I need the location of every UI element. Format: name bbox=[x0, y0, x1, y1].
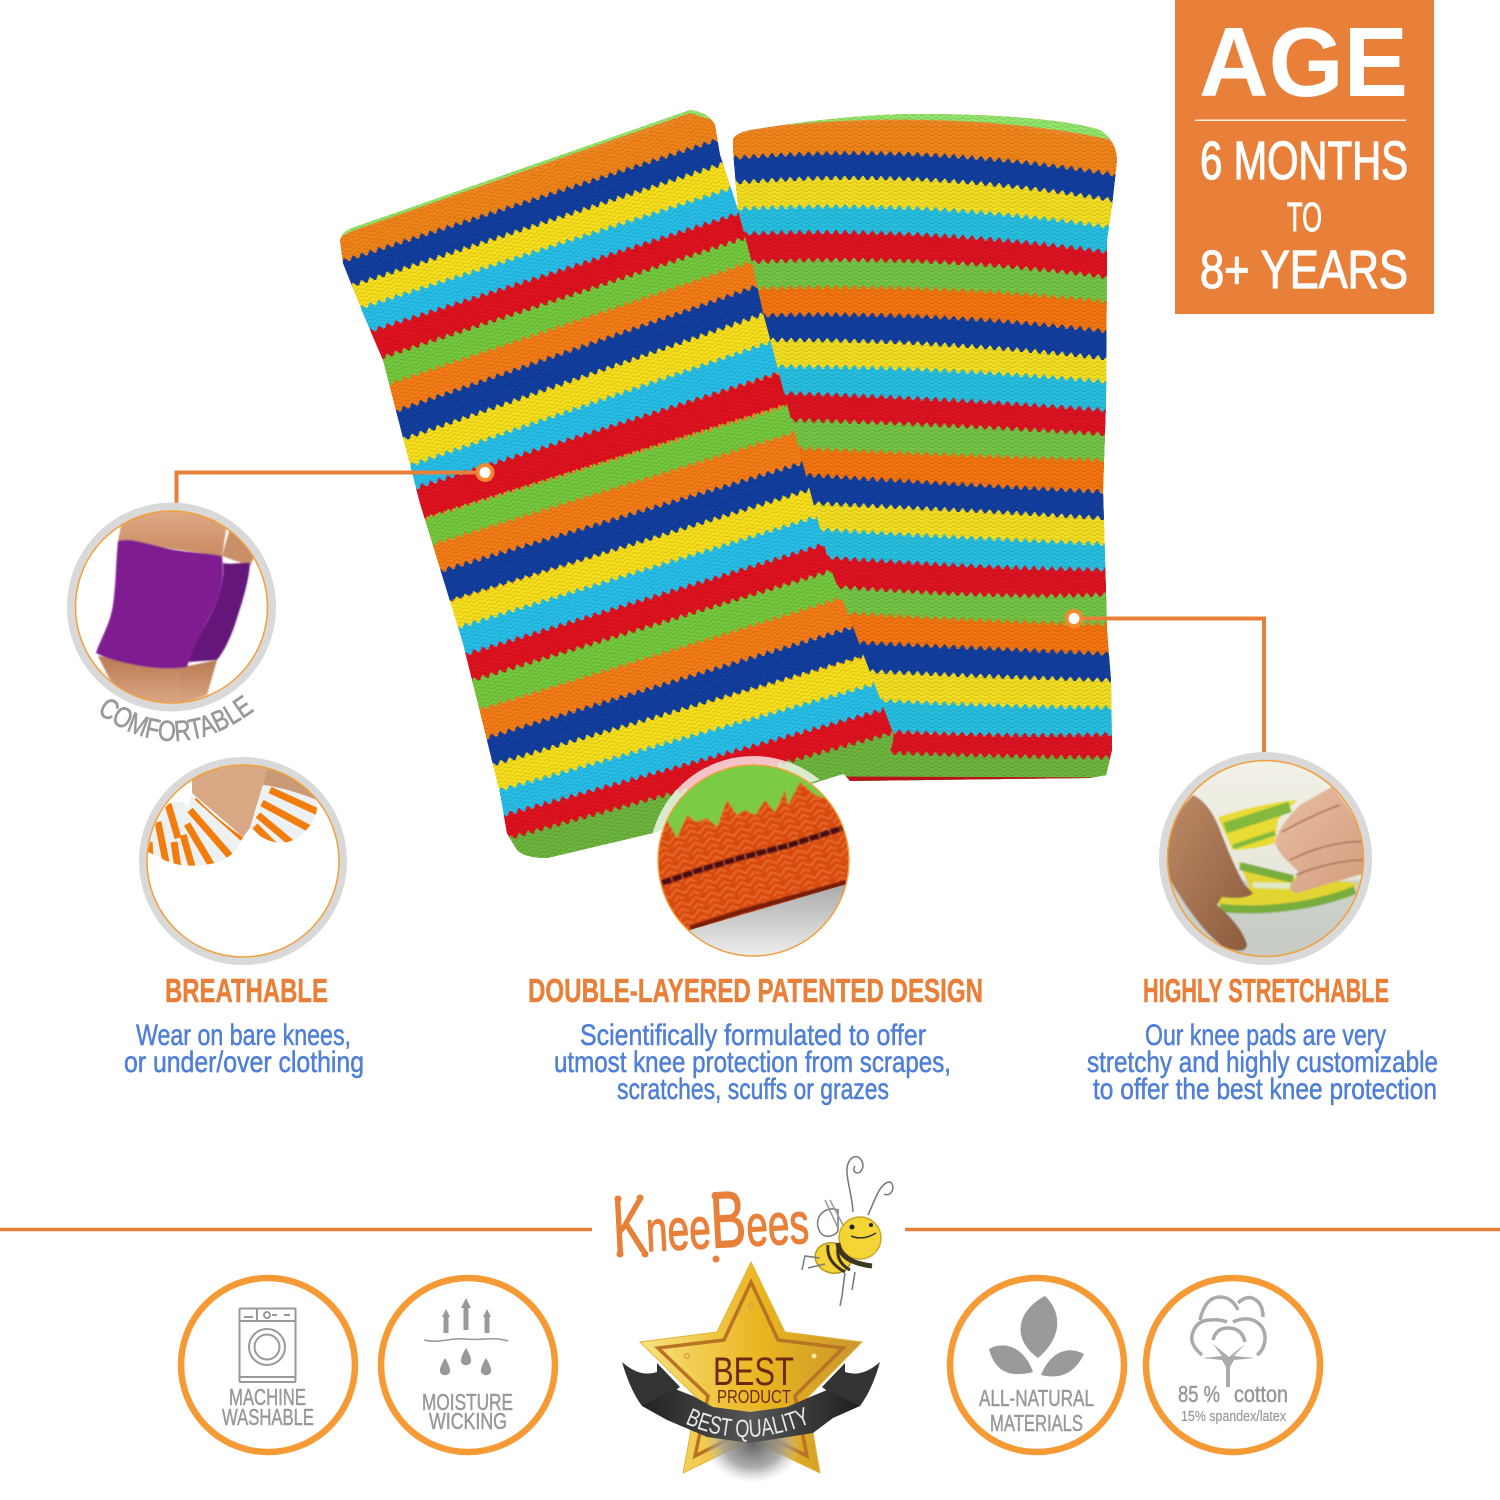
feature circle: moisture wicking: MOISTURE bbox=[422, 1389, 513, 1415]
text: double-layer description: Scientifically formulated to offer bbox=[580, 1019, 926, 1052]
text: double-layer description: scratches, scuffs or grazes bbox=[617, 1073, 889, 1106]
text: breathable description: or under/over clothing bbox=[124, 1046, 364, 1079]
text: breathable description: Wear on bare knees, bbox=[136, 1019, 351, 1052]
icon: bee mascot bbox=[802, 1157, 893, 1306]
curved label: comfortable: COMFORTABLE bbox=[100, 694, 254, 742]
feature circle: all-natural materials bbox=[950, 1278, 1124, 1452]
age badge: 6 MONTHS bbox=[1200, 131, 1408, 191]
badge: best product star: BEST bbox=[713, 1350, 794, 1394]
text: double-layer description: utmost knee protection from scrapes, bbox=[554, 1046, 951, 1079]
heading: breathable: BREATHABLE bbox=[165, 972, 328, 1009]
badge: best product star: PRODUCT bbox=[717, 1387, 791, 1407]
age badge: TO bbox=[1287, 194, 1322, 240]
feature circle: machine washable: MACHINE bbox=[229, 1384, 306, 1410]
product photo: right knee pad bbox=[725, 100, 1125, 790]
feature circle: machine washable: WASHABLE bbox=[222, 1404, 314, 1430]
feature circle: moisture wicking bbox=[381, 1278, 555, 1452]
text: double-layer description bbox=[554, 1019, 951, 1106]
text: stretchable description: Our knee pads are very bbox=[1145, 1019, 1386, 1052]
product photo: left knee pad bbox=[340, 110, 894, 858]
badge: best product star: BEST QUALITY bbox=[686, 1407, 806, 1442]
photo circle: breathable, orange striped knee pads bbox=[140, 760, 343, 961]
callout line and dot: stretchable bbox=[1064, 609, 1264, 755]
heading: double-layered design: DOUBLE-LAYERED PATENTED DESIGN bbox=[528, 972, 983, 1009]
text: stretchable description bbox=[1087, 1019, 1438, 1106]
photo circle: stretchable, hands stretching pad bbox=[1160, 756, 1368, 960]
age badge: 8+ YEARS bbox=[1200, 240, 1408, 300]
photo circle: double-layer detail bbox=[650, 755, 860, 965]
badge: best product star bbox=[622, 1261, 880, 1480]
feature circle: moisture wicking: WICKING bbox=[429, 1408, 507, 1434]
text: breathable description bbox=[124, 1019, 364, 1079]
feature circle: all-natural materials: ALL-NATURAL bbox=[979, 1385, 1094, 1411]
photo circle: comfortable, purple knee pads bbox=[71, 505, 272, 708]
logo: KneeBees wordmark: KneeBees bbox=[610, 1171, 811, 1270]
feature circle: cotton content: 15% spandex/latex bbox=[1181, 1408, 1286, 1425]
callout line and dot: comfortable bbox=[176, 463, 494, 505]
feature circle: cotton content: 85 % bbox=[1178, 1381, 1220, 1407]
feature circle: cotton content: cotton bbox=[1234, 1381, 1288, 1407]
feature circle: all-natural materials: MATERIALS bbox=[990, 1410, 1083, 1436]
feature circle: cotton content bbox=[1146, 1278, 1320, 1452]
age badge: AGE bbox=[1199, 7, 1408, 117]
feature circle: machine washable bbox=[181, 1278, 355, 1452]
age badge bbox=[1175, 0, 1434, 314]
